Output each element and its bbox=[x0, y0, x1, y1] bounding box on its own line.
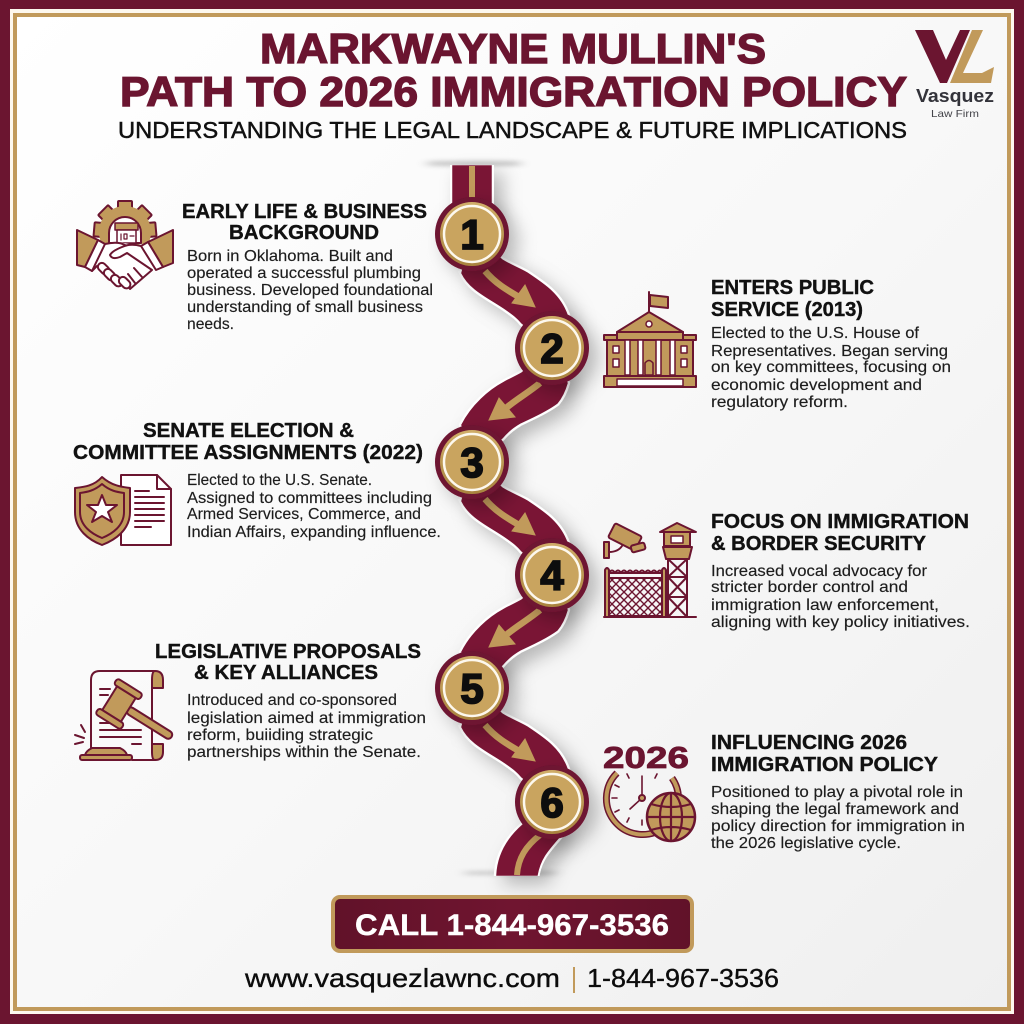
text block: enters public service: Representatives. Began serving bbox=[711, 343, 948, 360]
step marker 4 bbox=[515, 538, 589, 612]
text block: early life and business background: Born in Oklahoma. Built and bbox=[187, 248, 393, 265]
call to action button: CALL 1-844-967-3536 bbox=[355, 909, 669, 942]
text block: legislative proposals and key alliances: Introduced and co-sponsored bbox=[187, 692, 397, 709]
text block: senate election and committee assignments: Elected to the U.S. Senate. bbox=[187, 472, 372, 489]
top shadow of path bbox=[428, 161, 520, 166]
title: PATH TO 2026 IMMIGRATION POLICY bbox=[120, 68, 907, 115]
text block: enters public service: SERVICE (2013) bbox=[711, 299, 863, 321]
text block: early life and business background: BACKGROUND bbox=[229, 222, 379, 244]
text block: focus on immigration and border security: FOCUS ON IMMIGRATION bbox=[711, 511, 969, 533]
text block: influencing 2026 immigration policy: IMMIGRATION POLICY bbox=[711, 754, 939, 776]
footer contact line: www.vasquezlawnc.com bbox=[244, 963, 560, 993]
text block: focus on immigration and border security: stricter border control and bbox=[711, 579, 908, 596]
bottom shadow of path bbox=[465, 871, 555, 875]
text block: enters public service: ENTERS PUBLIC bbox=[711, 277, 874, 299]
step marker 6 bbox=[515, 765, 589, 839]
text block: focus on immigration and border security: immigration law enforcement, bbox=[711, 597, 939, 614]
icon: gavel and scroll bbox=[75, 671, 183, 760]
icon: 2026 clock and globe bbox=[603, 740, 695, 841]
text block: senate election and committee assignments: SENATE ELECTION & bbox=[143, 420, 354, 442]
text block: senate election and committee assignments bbox=[73, 420, 441, 541]
title: MARKWAYNE MULLIN'S bbox=[260, 25, 766, 72]
icon: capitol building bbox=[604, 292, 696, 387]
text block: influencing 2026 immigration policy: shaping the legal framework and bbox=[711, 801, 959, 818]
text block: enters public service: economic development and bbox=[711, 377, 922, 394]
path band segments: white edge bbox=[453, 168, 567, 873]
text block: influencing 2026 immigration policy: INFLUENCING 2026 bbox=[711, 732, 907, 754]
logo: Vasquez Law Firm: Vasquez bbox=[916, 86, 994, 106]
text block: early life and business background: understanding of small business bbox=[187, 299, 423, 316]
title bbox=[120, 25, 907, 115]
text block: enters public service: Elected to the U.S. House of bbox=[711, 325, 920, 342]
text block: senate election and committee assignments: Assigned to committees including bbox=[187, 490, 432, 507]
step marker 3 bbox=[435, 425, 509, 499]
icon: camera, fence and watchtower bbox=[604, 523, 696, 617]
text block: enters public service: on key committees, focusing on bbox=[711, 359, 951, 376]
text block: focus on immigration and border security: aligning with key policy initiatives. bbox=[711, 614, 970, 631]
logo: Vasquez Law Firm bbox=[915, 30, 994, 120]
text block: influencing 2026 immigration policy: policy direction for immigration in bbox=[711, 818, 965, 835]
text block: influencing 2026 immigration policy: Positioned to play a pivotal role in bbox=[711, 784, 963, 801]
text block: legislative proposals and key alliances bbox=[155, 641, 426, 761]
text block: early life and business background: business. Developed foundational bbox=[187, 282, 433, 299]
gold stripes and arrows bbox=[469, 166, 540, 875]
text block: enters public service bbox=[711, 277, 951, 411]
step marker 6: 6 bbox=[540, 779, 564, 826]
footer contact line: 1-844-967-3536 bbox=[587, 963, 779, 993]
icon: shield and document bbox=[75, 475, 171, 545]
footer contact line bbox=[244, 963, 779, 993]
step marker 3: 3 bbox=[460, 439, 484, 486]
text block: senate election and committee assignments: Indian Affairs, expanding influence. bbox=[187, 524, 441, 541]
text block: focus on immigration and border security: Increased vocal advocacy for bbox=[711, 563, 928, 580]
step marker 1: 1 bbox=[460, 211, 484, 258]
step marker 4: 4 bbox=[540, 552, 564, 599]
text block: influencing 2026 immigration policy: the 2026 legislative cycle. bbox=[711, 835, 901, 852]
step marker 5: 5 bbox=[460, 665, 484, 712]
step marker 2 bbox=[515, 311, 589, 385]
text block: senate election and committee assignments: COMMITTEE ASSIGNMENTS (2022) bbox=[73, 442, 423, 464]
step marker 2: 2 bbox=[540, 325, 564, 372]
icon: 2026 clock and globe: 2026 bbox=[603, 740, 689, 775]
text block: early life and business background: operated a successful plumbing bbox=[187, 265, 421, 282]
text block: focus on immigration and border security: & BORDER SECURITY bbox=[711, 533, 927, 555]
winding path bbox=[428, 161, 567, 875]
text block: early life and business background bbox=[182, 201, 433, 333]
text block: legislative proposals and key alliances: partnerships within the Senate. bbox=[187, 744, 421, 761]
text block: senate election and committee assignments: Armed Services, Commerce, and bbox=[187, 506, 421, 523]
text block: enters public service: regulatory reform. bbox=[711, 394, 848, 411]
text block: legislative proposals and key alliances: & KEY ALLIANCES bbox=[194, 662, 378, 684]
text block: early life and business background: EARLY LIFE & BUSINESS bbox=[182, 201, 427, 223]
step marker 1 bbox=[435, 197, 509, 271]
step marker 5 bbox=[435, 651, 509, 725]
subtitle: UNDERSTANDING THE LEGAL LANDSCAPE & FUTURE IMPLICATIONS bbox=[118, 117, 907, 143]
text block: legislative proposals and key alliances: LEGISLATIVE PROPOSALS bbox=[155, 641, 421, 663]
path band segments: fill bbox=[453, 166, 567, 875]
text block: early life and business background: needs. bbox=[187, 316, 234, 333]
icon: handshake and gear bbox=[77, 201, 173, 290]
text block: legislative proposals and key alliances: legislation aimed at immigration bbox=[187, 710, 426, 727]
text block: focus on immigration and border security bbox=[711, 511, 970, 631]
text block: legislative proposals and key alliances: reform, buiiding strategic bbox=[187, 727, 373, 744]
call to action button bbox=[331, 895, 694, 953]
text block: influencing 2026 immigration policy bbox=[711, 732, 965, 852]
logo: Vasquez Law Firm: Law Firm bbox=[931, 108, 979, 120]
